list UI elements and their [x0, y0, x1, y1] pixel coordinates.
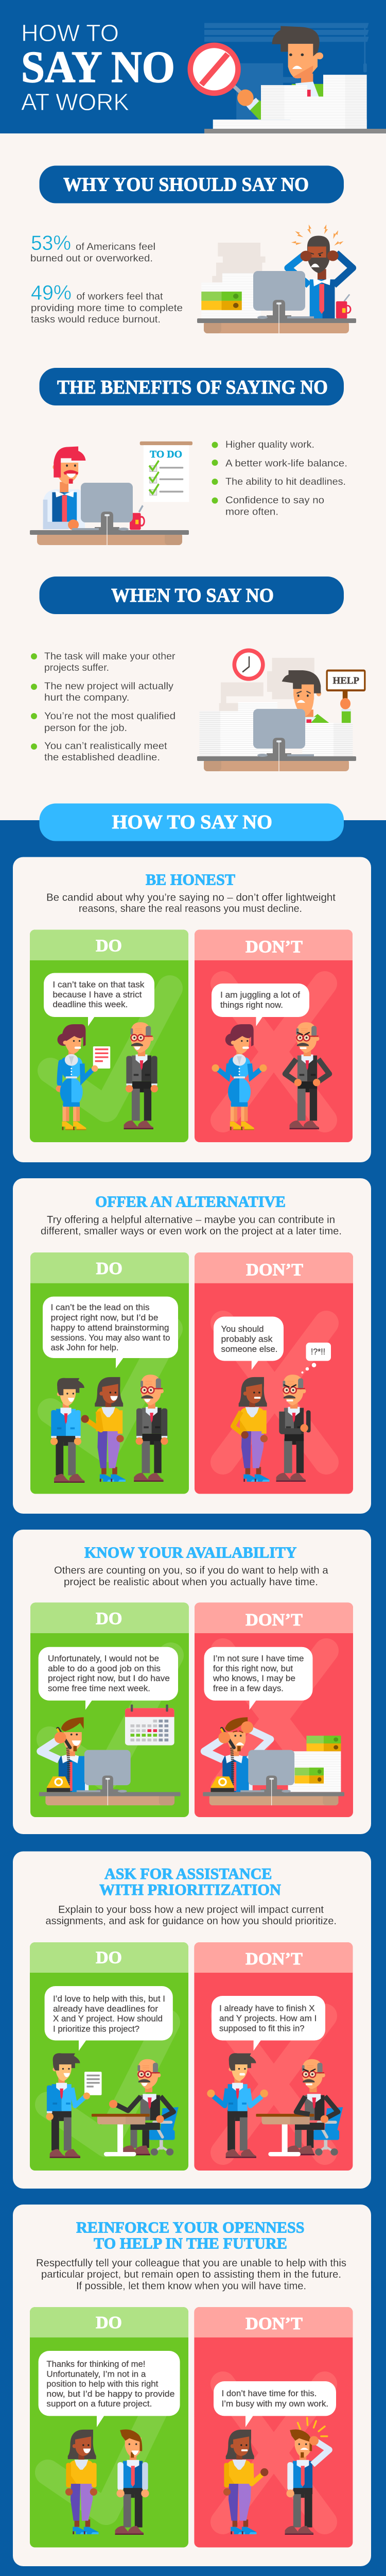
heading: OFFER AN ALTERNATIVE: [95, 1192, 286, 1211]
stat: 53 percent: 53%: [31, 232, 71, 255]
card: reinforce your openness: [13, 2205, 371, 2566]
icon: calendar: [125, 1704, 174, 1745]
card: know your availability: [13, 1530, 371, 1834]
character: woman gesturing: [223, 2430, 268, 2534]
heading: why you should say no: [39, 166, 344, 203]
speech bubble: I’d love to help with this, but I: [53, 1994, 165, 2004]
description: Try offering a helpful alternative – maybe you can contribute in: [47, 1214, 335, 1226]
description: different, smaller ways or even work on the project at a later time.: [41, 1226, 342, 1237]
speech bubble: [214, 2381, 336, 2427]
stat: 53 percent: of Americans feel: [76, 242, 155, 252]
speech bubble: I am juggling a lot of: [220, 990, 300, 999]
description: [41, 1214, 342, 1237]
speech bubble: sessions. You may also want to: [50, 1333, 170, 1343]
title: AT WORK: [21, 89, 129, 115]
description: reasons, share the real reasons you must decline.: [79, 903, 302, 914]
heading: how to say no: [39, 804, 344, 841]
list: benefits: The ability to hit deadlines.: [225, 477, 346, 487]
description: Respectfully tell your colleague that you are unable to help with this: [36, 2258, 346, 2269]
speech bubble: [214, 1317, 284, 1370]
character: boss: [134, 1375, 168, 1482]
stat: 49 percent: 49%: [31, 281, 72, 304]
panel: don't: DON’T: [245, 1611, 303, 1630]
panel: don't: DON’T: [245, 1950, 303, 1969]
stats text: [30, 232, 183, 325]
list: benefits: A better work-life balance.: [225, 459, 347, 469]
character: boss: [124, 1022, 158, 1129]
character: boss with arms crossed: [276, 1375, 311, 1482]
speech bubble: now, but I’d be happy to provide: [46, 2389, 174, 2399]
speech bubble: free in a few days.: [213, 1683, 284, 1693]
description: particular project, but remain open to assisting them in the future.: [41, 2269, 341, 2280]
header banner: [0, 0, 386, 133]
card: offer an alternative: [13, 1178, 371, 1514]
character: man in blue suit: [50, 1378, 84, 1483]
card: ask for assistance with prioritization: [13, 1852, 371, 2189]
speech bubble: I don’t have time for this.: [221, 2388, 317, 2398]
speech bubble: ask John for help.: [50, 1343, 118, 1352]
speech bubble: for this right now, but: [213, 1664, 293, 1673]
heading: KNOW YOUR AVAILABILITY: [84, 1544, 296, 1561]
title: [21, 20, 175, 115]
character: angry boss: [285, 1022, 329, 1129]
speech bubble: probably ask: [221, 1334, 273, 1344]
stat: 53 percent: [30, 232, 155, 264]
speech bubble: and Y projects. How am I: [219, 2013, 317, 2023]
character: woman with document: [56, 1024, 110, 1130]
character: man with raised fists: [207, 2053, 268, 2158]
heading: the benefits of saying no: [39, 368, 344, 405]
character: woman gesturing: [81, 1377, 126, 1482]
speech bubble: I can’t be the lead on this: [50, 1302, 149, 1312]
panel: do: DO: [96, 1948, 122, 1968]
speech bubble: some free time next week.: [48, 1683, 150, 1693]
heading: WITH PRIORITIZATION: [99, 1880, 281, 1899]
speech bubble: [43, 1297, 178, 1368]
heading: [76, 2218, 305, 2252]
panel: don't: [194, 2307, 353, 2547]
list: benefits: more often.: [225, 507, 278, 517]
character: seated boss at table: [92, 2059, 179, 2156]
speech bubble: because I have a strict: [52, 990, 142, 999]
list: benefits: [212, 439, 347, 517]
panel: do: DO: [96, 2313, 122, 2332]
description: [46, 892, 336, 914]
description: assignments, and ask for guidance on how you should prioritize.: [45, 1916, 337, 1927]
description: Be candid about why you’re saying no – don’t offer lightweight: [46, 892, 336, 904]
speech bubble: project right now, but I do have: [48, 1673, 170, 1683]
heading: ASK FOR ASSISTANCE: [104, 1865, 272, 1883]
list: when to say no: the established deadline.: [44, 752, 160, 763]
speech bubble: able to do a good job on this: [48, 1664, 161, 1673]
description: Others are counting on you, so if you do want to help with a: [54, 1565, 328, 1577]
label: help sign: HELP: [332, 675, 359, 686]
character: man in vest: [115, 2429, 149, 2535]
speech bubble: someone else.: [221, 1344, 278, 1354]
speech bubble: already have deadlines for: [53, 2004, 158, 2014]
speech bubble: You should: [221, 1324, 264, 1334]
speech bubble: Unfortunately, I would not be: [48, 1654, 159, 1664]
stat: 49 percent: tasks would reduce burnout.: [31, 314, 161, 325]
description: [36, 2258, 346, 2292]
list: when to say no: projects suffer.: [44, 663, 109, 673]
title: SAY NO: [21, 42, 175, 92]
illustration: stressed man at desk: [197, 225, 356, 333]
description: [45, 1904, 337, 1927]
speech bubble: [212, 1996, 325, 2050]
character: woman hand on hip: [233, 1377, 269, 1482]
list: benefits: Confidence to say no: [225, 495, 324, 506]
thought bubble: [302, 1343, 331, 1374]
list: when to say no: You can’t realistically meet: [44, 741, 167, 752]
list: when to say no: The task will make your other: [44, 651, 176, 662]
description: Explain to your boss how a new project will impact current: [58, 1904, 324, 1916]
panel: do: [30, 1603, 189, 1817]
panel: do: [30, 929, 188, 1142]
list: when to say no: hurt the company.: [44, 692, 130, 703]
heading: REINFORCE YOUR OPENNESS: [76, 2218, 305, 2236]
section background: how to say no: [0, 820, 386, 2576]
speech bubble: I already have to finish X: [219, 2004, 315, 2013]
speech bubble: [45, 1986, 173, 2050]
panel: do: [30, 1252, 189, 1494]
panel: don't: [195, 1252, 353, 1494]
speech bubble: X and Y project. How should: [53, 2014, 163, 2024]
heading: [99, 1865, 281, 1899]
stat: 49 percent: of workers feel that: [76, 292, 163, 302]
speech bubble: I’m busy with my own work.: [221, 2399, 328, 2409]
panel: don't: DON’T: [246, 1260, 303, 1280]
speech bubble: project right now, but I’d be: [50, 1313, 159, 1323]
panel: don't: [195, 1603, 353, 1817]
speech bubble: [39, 2351, 180, 2427]
heading: why you should say no: WHY YOU SHOULD SAY NO: [63, 174, 309, 196]
illustration: overwhelmed man with help sign: [197, 649, 365, 771]
speech bubble: Unfortunately, I’m not in a: [46, 2369, 146, 2379]
heading: BE HONEST: [146, 871, 235, 888]
speech bubble: [39, 1647, 178, 1710]
character: man with document: [46, 2053, 102, 2158]
panel: do: DO: [96, 1259, 122, 1278]
speech bubble: I’m not sure I have time: [213, 1654, 304, 1664]
heading: TO HELP IN THE FUTURE: [94, 2234, 287, 2252]
list: when to say no: person for the job.: [44, 723, 127, 734]
list: when to say no: You’re not the most qualified: [44, 711, 176, 722]
character: stressed man on phone at desk: [203, 1717, 344, 1805]
description: project be realistic about when you actually have time.: [64, 1577, 318, 1588]
stat: 53 percent: burned out or overworked.: [30, 253, 153, 264]
panel: do: [30, 2307, 188, 2547]
speech bubble: [212, 984, 309, 1026]
illustration: paper stacks and folders: [288, 1736, 341, 1792]
speech bubble: deadline this week.: [52, 999, 128, 1009]
label: to do: TO DO: [150, 449, 182, 460]
speech bubble: supposed to fit this in?: [219, 2023, 305, 2033]
speech bubble: [44, 973, 154, 1026]
character: confused man in vest: [285, 2418, 329, 2535]
character: woman shrugging: [212, 1024, 267, 1130]
panel: don't: DON’T: [245, 938, 303, 956]
heading: when to say no: WHEN TO SAY NO: [111, 585, 274, 606]
speech bubble: I prioritize this project?: [53, 2024, 139, 2033]
character: woman: [65, 2430, 98, 2534]
speech bubble: position to help with this right: [46, 2379, 159, 2389]
speech bubble: [204, 1647, 313, 1710]
character: angry seated boss at table: [256, 2059, 343, 2156]
folder in front of monitor edge: [295, 1768, 324, 1784]
thought bubble: !?*!!: [311, 1347, 325, 1357]
description: [54, 1565, 328, 1588]
heading: how to say no: HOW TO SAY NO: [112, 811, 272, 833]
description: If possible, let them know when you will have time.: [76, 2281, 306, 2292]
illustration: man holding no sign behind paper stacks: [187, 23, 386, 133]
list: when to say no: The new project will actually: [44, 681, 174, 692]
panel: don't: DON’T: [245, 2314, 303, 2333]
panel: do: DO: [96, 937, 122, 955]
list: benefits: Higher quality work.: [225, 439, 314, 450]
stat: 49 percent: providing more time to complete: [31, 303, 183, 314]
panel: do: DO: [96, 1609, 122, 1628]
panel: don't: [195, 929, 353, 1142]
panel: don't: [194, 1942, 353, 2171]
speech bubble: I can’t take on that task: [52, 979, 145, 989]
speech bubble: who knows, I may be: [213, 1673, 295, 1683]
illustration: happy man at desk with to-do list: [30, 442, 192, 545]
character: happy man on phone at desk: [39, 1717, 181, 1805]
list: when to say no: [31, 651, 176, 763]
speech bubble: Thanks for thinking of me!: [46, 2359, 145, 2369]
heading: when to say no: [39, 577, 344, 614]
speech bubble: things right now.: [220, 1000, 283, 1010]
stat: 49 percent: [31, 281, 183, 325]
heading: the benefits of saying no: THE BENEFITS OF SAYING NO: [57, 377, 328, 398]
speech bubble: happy to attend brainstorming: [50, 1323, 169, 1333]
speech bubble: support on a future project.: [46, 2399, 152, 2409]
panel: do: [30, 1942, 188, 2171]
title: HOW TO: [21, 20, 119, 46]
card: be honest: [13, 857, 371, 1162]
